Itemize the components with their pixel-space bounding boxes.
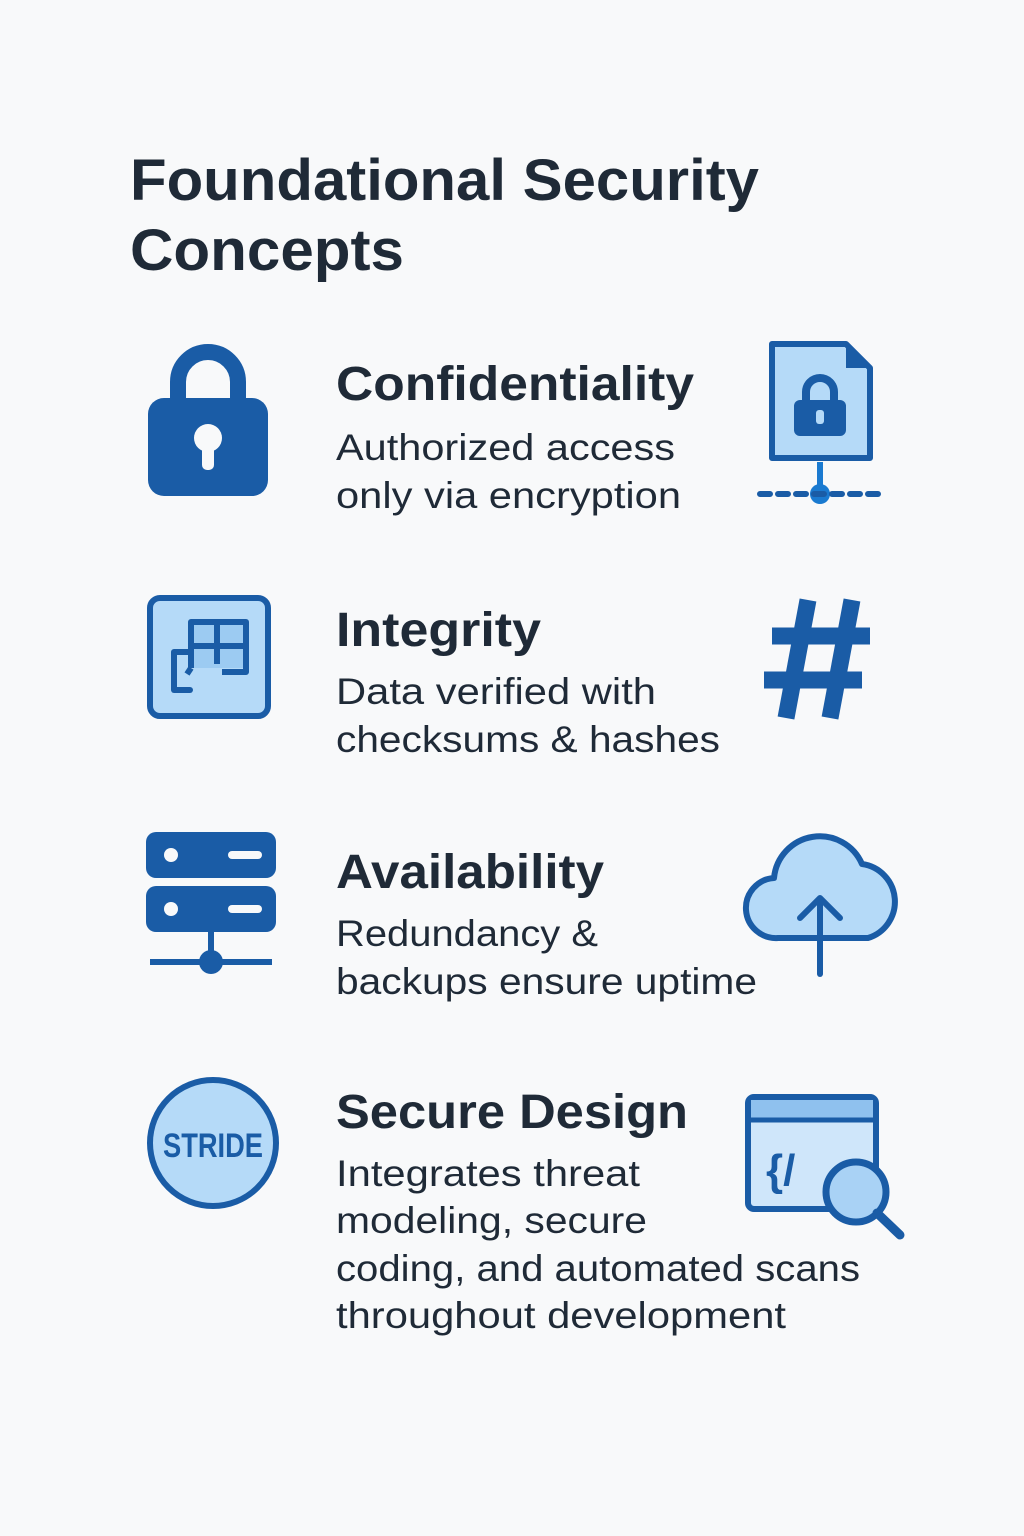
title [130,148,759,283]
title: Concepts [130,218,404,283]
icon: STRIDE badge: STRIDE [163,1127,263,1165]
icon: cloud upload [746,836,895,974]
icon: encrypted file on network [760,344,880,504]
text: secure design: Secure Design [336,1086,688,1139]
text: integrity: checksums & hashes [336,719,720,760]
text: secure design: Integrates threat [336,1153,641,1194]
icon: code window with magnifier [748,1097,900,1235]
text: confidentiality [336,358,694,516]
text: availability [336,846,757,1002]
text: secure design: modeling, secure [336,1200,647,1241]
text: secure design [336,1086,860,1336]
text: secure design: coding, and automated scans [336,1248,860,1289]
title: Foundational Security [130,148,759,213]
text: availability: Availability [336,846,604,899]
icon: padlock [148,352,268,496]
text: integrity [336,604,720,760]
text: availability: Redundancy & [336,913,598,954]
icon: hash [764,600,870,718]
icon: code window with magnifier: {/ [766,1146,795,1195]
text: integrity: Data verified with [336,671,656,712]
text: confidentiality: only via encryption [336,475,681,516]
text: confidentiality: Authorized access [336,427,675,468]
text: availability: backups ensure uptime [336,961,757,1002]
icon: server [146,832,276,974]
text: confidentiality: Confidentiality [336,358,694,411]
text: integrity: Integrity [336,604,541,657]
text: secure design: throughout development [336,1295,787,1336]
icon: integrity blocks [150,598,268,716]
icon: STRIDE badge [150,1080,276,1206]
